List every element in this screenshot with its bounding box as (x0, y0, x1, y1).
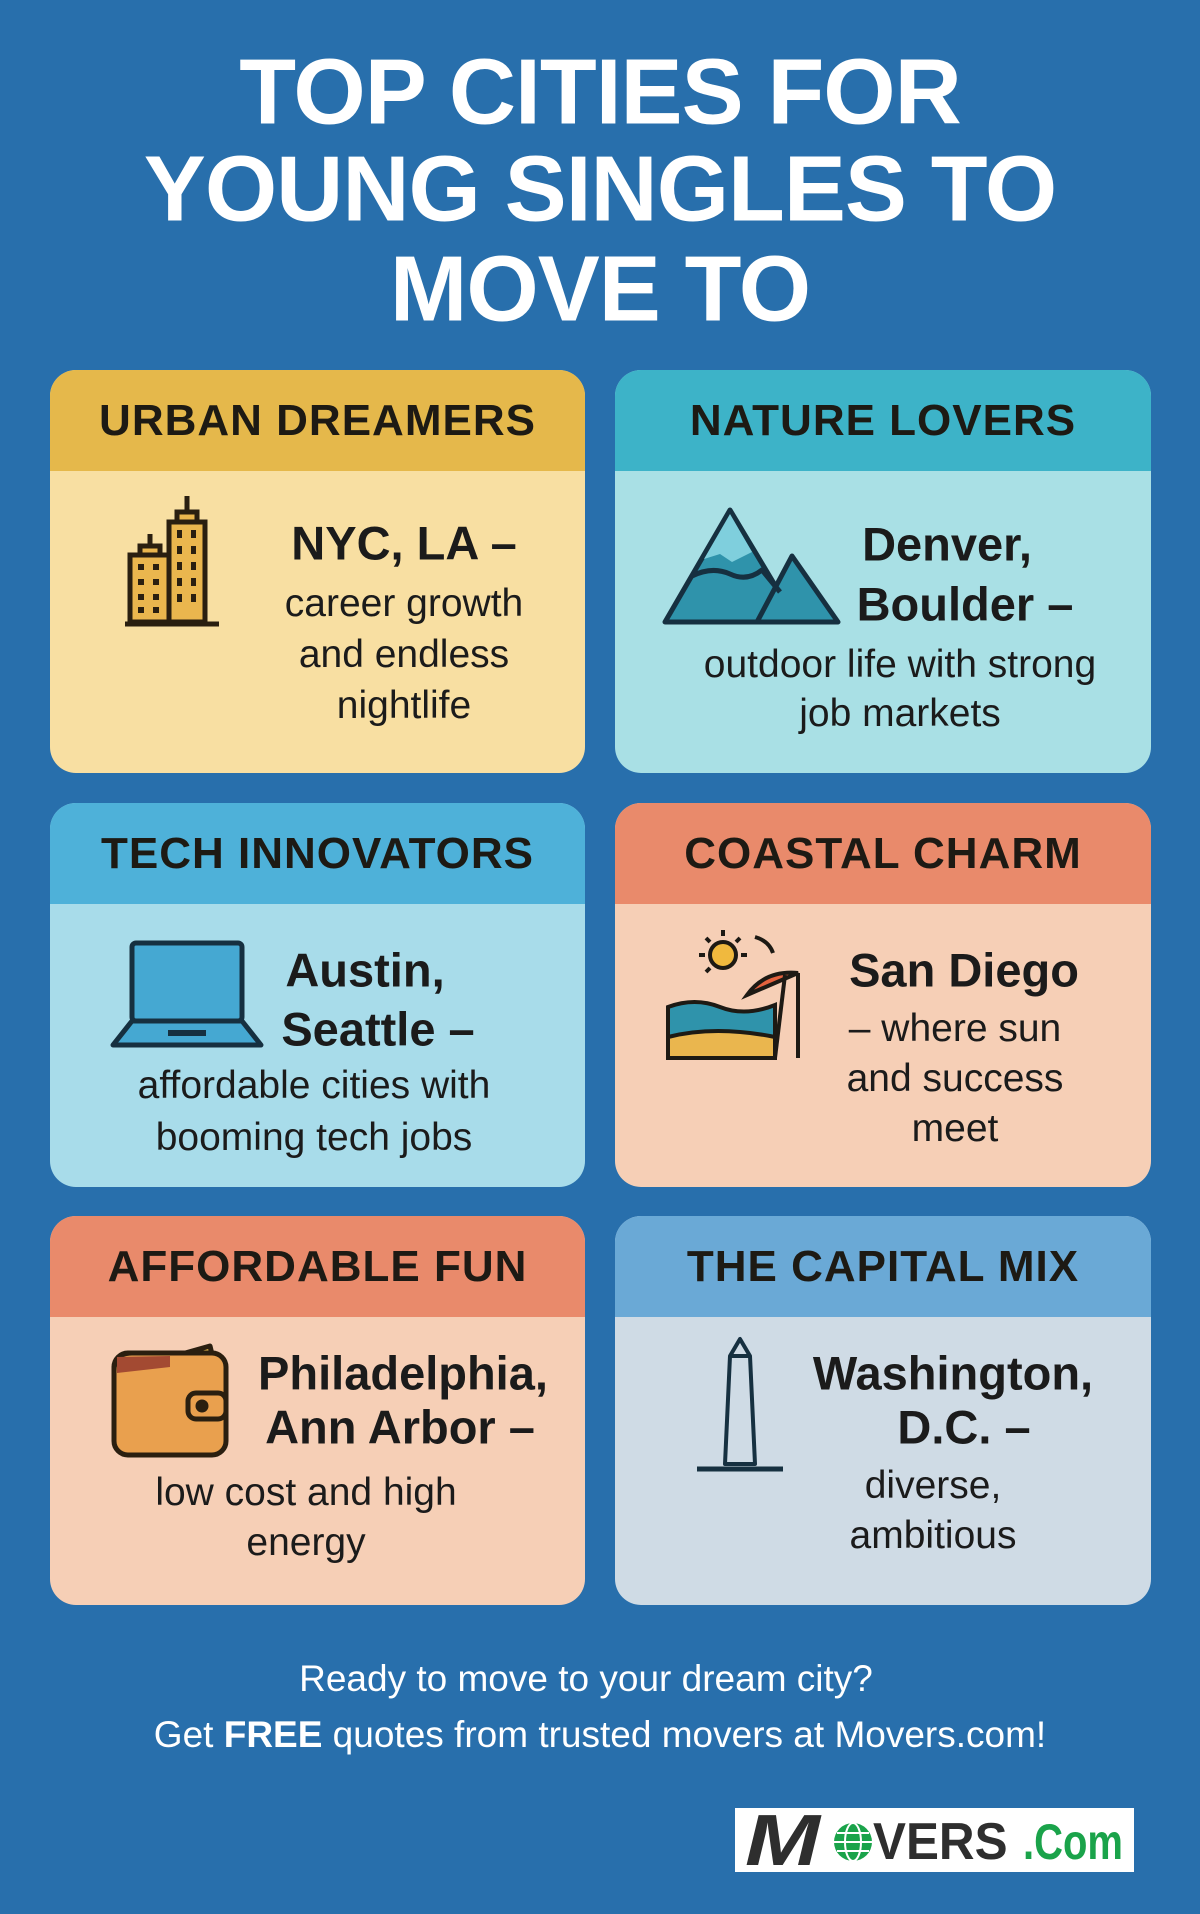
logo: Movers.com: .Com (1023, 1814, 1123, 1870)
title (144, 40, 1056, 340)
heading: tech innovators: TECH INNOVATORS (101, 828, 534, 878)
panel: the capital mix (615, 1216, 1151, 1605)
heading: affordable fun (50, 1216, 585, 1317)
panel: affordable fun: Ann Arbor – (265, 1400, 535, 1454)
panel: the capital mix: D.C. – (897, 1400, 1031, 1454)
panel: coastal charm: meet (912, 1107, 998, 1150)
panel: urban dreamers: and endless (299, 633, 509, 676)
panel: coastal charm: and success (847, 1057, 1063, 1100)
title: YOUNG SINGLES TO (144, 136, 1056, 240)
panel: nature lovers: job markets (799, 692, 1001, 735)
panel: the capital mix: ambitious (850, 1514, 1016, 1557)
title: MOVE TO (390, 236, 810, 340)
text: San Diego: San Diego (849, 944, 1079, 996)
logo: Movers.com: VERS (873, 1813, 1008, 1871)
panel: urban dreamers: nightlife (337, 684, 471, 727)
panel: coastal charm: – where sun (849, 1007, 1061, 1050)
panel: urban dreamers (50, 370, 585, 773)
panel: urban dreamers: career growth (285, 582, 523, 625)
icon: wallet (112, 1344, 228, 1458)
panel: nature lovers: outdoor life with strong (704, 643, 1096, 686)
heading: tech innovators (50, 803, 585, 904)
icon: buildings (125, 496, 219, 626)
heading: affordable fun: AFFORDABLE FUN (108, 1242, 527, 1290)
panel: tech innovators: Seattle – (281, 1002, 475, 1056)
footer call to action: Ready to move to your dream city? (299, 1658, 873, 1699)
heading: nature lovers (615, 370, 1151, 471)
heading: urban dreamers (50, 370, 585, 471)
panel: tech innovators: booming tech jobs (156, 1116, 472, 1159)
icon: globe (834, 1823, 872, 1861)
panel: coastal charm (615, 803, 1151, 1187)
heading: the capital mix (615, 1216, 1151, 1317)
panel: nature lovers (615, 370, 1151, 773)
title: TOP CITIES FOR (239, 40, 961, 144)
panel: affordable fun (50, 1216, 585, 1605)
text: Austin, Seattle: Austin, (285, 944, 445, 996)
icon: monument (697, 1336, 783, 1472)
heading: the capital mix: THE CAPITAL MIX (687, 1242, 1079, 1290)
logo: Movers.com (735, 1808, 1134, 1872)
panel: the capital mix: diverse, (865, 1464, 1001, 1507)
icon: laptop (110, 940, 264, 1048)
heading: nature lovers: NATURE LOVERS (690, 396, 1076, 444)
heading: urban dreamers: URBAN DREAMERS (99, 396, 536, 444)
panel: tech innovators (50, 803, 585, 1187)
text: Denver, Boulder: Denver, (862, 518, 1032, 570)
text: Philadelphia, Ann Arbor: Philadelphia, (258, 1346, 548, 1400)
heading: coastal charm: COASTAL CHARM (684, 828, 1082, 878)
text: Washington, D.C.: Washington, (813, 1346, 1093, 1400)
heading: coastal charm (615, 803, 1151, 904)
icon: beach (666, 930, 800, 1060)
icon: mountains (662, 508, 840, 624)
footer call to action: Get FREE quotes from trusted movers at Movers.com! (154, 1714, 1046, 1755)
panel: affordable fun: low cost and high (155, 1471, 457, 1514)
panel: nature lovers: Boulder – (857, 578, 1073, 630)
footer call to action (154, 1658, 1046, 1755)
text: NYC, LA: NYC, LA – (291, 516, 517, 570)
panel: affordable fun: energy (246, 1521, 366, 1564)
panel: tech innovators: affordable cities with (138, 1064, 490, 1107)
